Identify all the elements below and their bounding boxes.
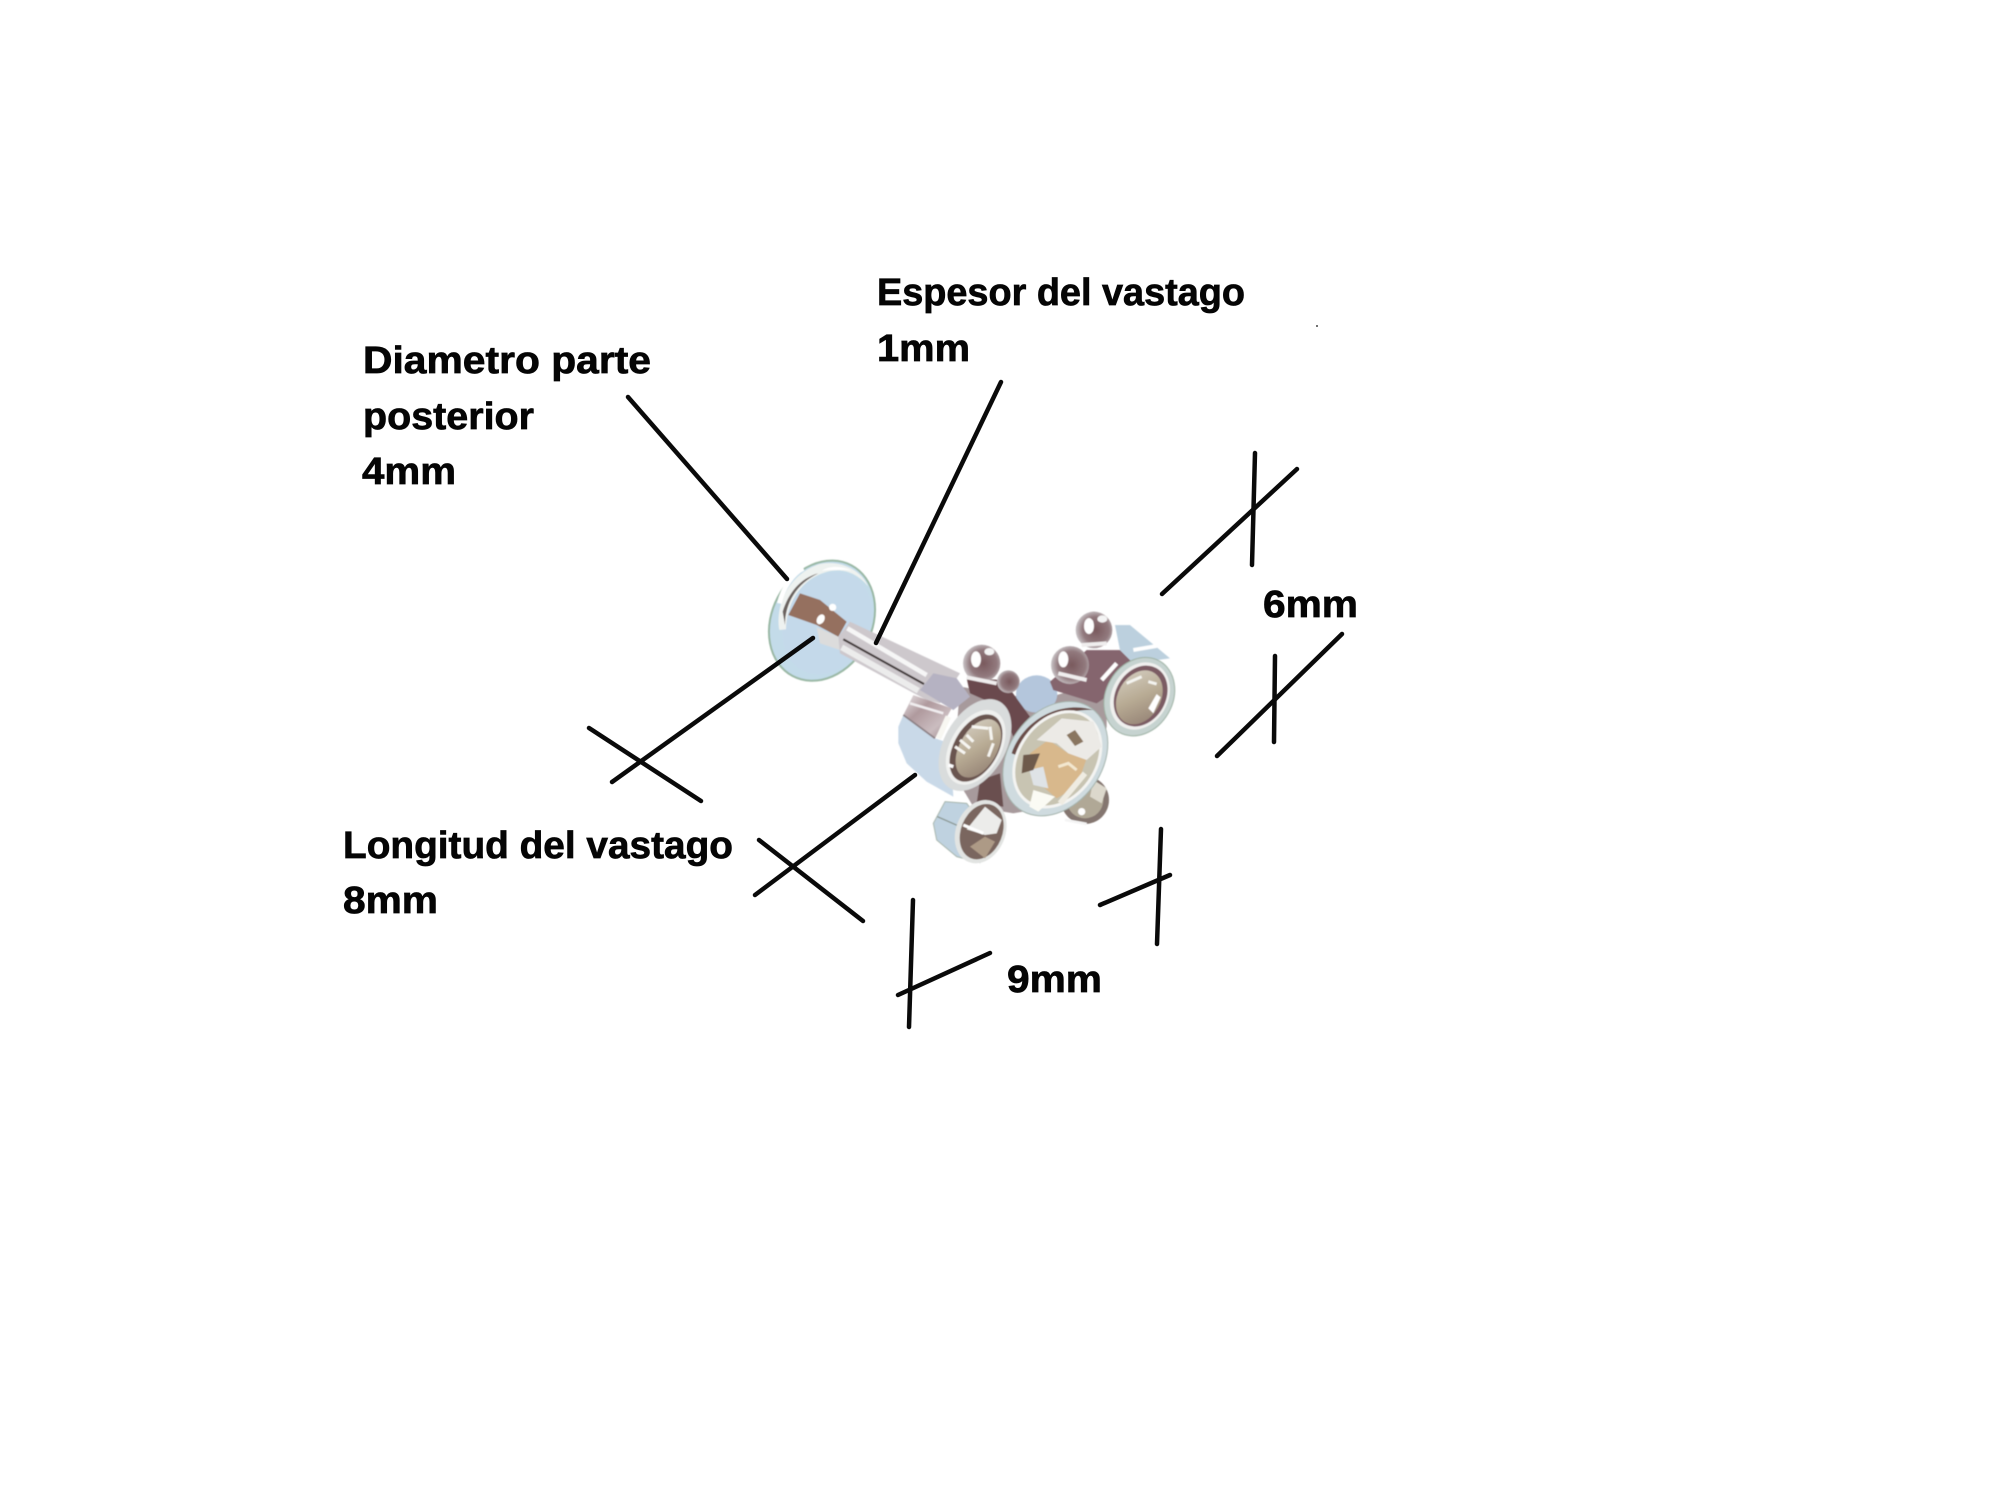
speck — [1316, 325, 1318, 327]
left stone — [923, 686, 1027, 804]
left setting body — [898, 673, 970, 797]
leader line: back diameter — [628, 397, 787, 579]
dimension marks: shaft length — [589, 638, 915, 921]
leader line: shaft thickness — [876, 382, 1001, 643]
shaft — [838, 622, 960, 703]
lower left stone — [933, 792, 1016, 871]
label: shaft length: 8mm — [343, 880, 438, 922]
label: shaft length — [343, 825, 733, 922]
label: back diameter — [362, 340, 651, 493]
label: 6mm height: 6mm — [1263, 584, 1358, 626]
label: 9mm width: 9mm — [1007, 959, 1102, 1001]
label: back diameter: posterior — [363, 396, 534, 438]
back disc — [748, 542, 896, 699]
rear post — [788, 593, 847, 650]
label: shaft thickness: Espesor del vastago — [877, 272, 1245, 314]
right setting body — [1090, 625, 1189, 749]
center stone — [981, 681, 1129, 836]
center back dome — [1016, 675, 1057, 713]
piercing photo illustration — [748, 542, 1189, 871]
label: back diameter: Diametro parte — [363, 340, 651, 382]
label: shaft thickness: 1mm — [877, 328, 970, 370]
label: shaft length: Longitud del vastago — [343, 825, 733, 867]
backing mass between settings — [953, 680, 1107, 813]
label: shaft thickness — [877, 272, 1245, 370]
dimension marks: 6mm height — [1162, 453, 1342, 756]
connecting metal — [967, 650, 1133, 807]
label: back diameter: 4mm — [362, 451, 456, 493]
lower right stone — [1061, 776, 1109, 824]
dimension marks: 9mm width — [898, 829, 1170, 1027]
balls — [963, 612, 1112, 693]
